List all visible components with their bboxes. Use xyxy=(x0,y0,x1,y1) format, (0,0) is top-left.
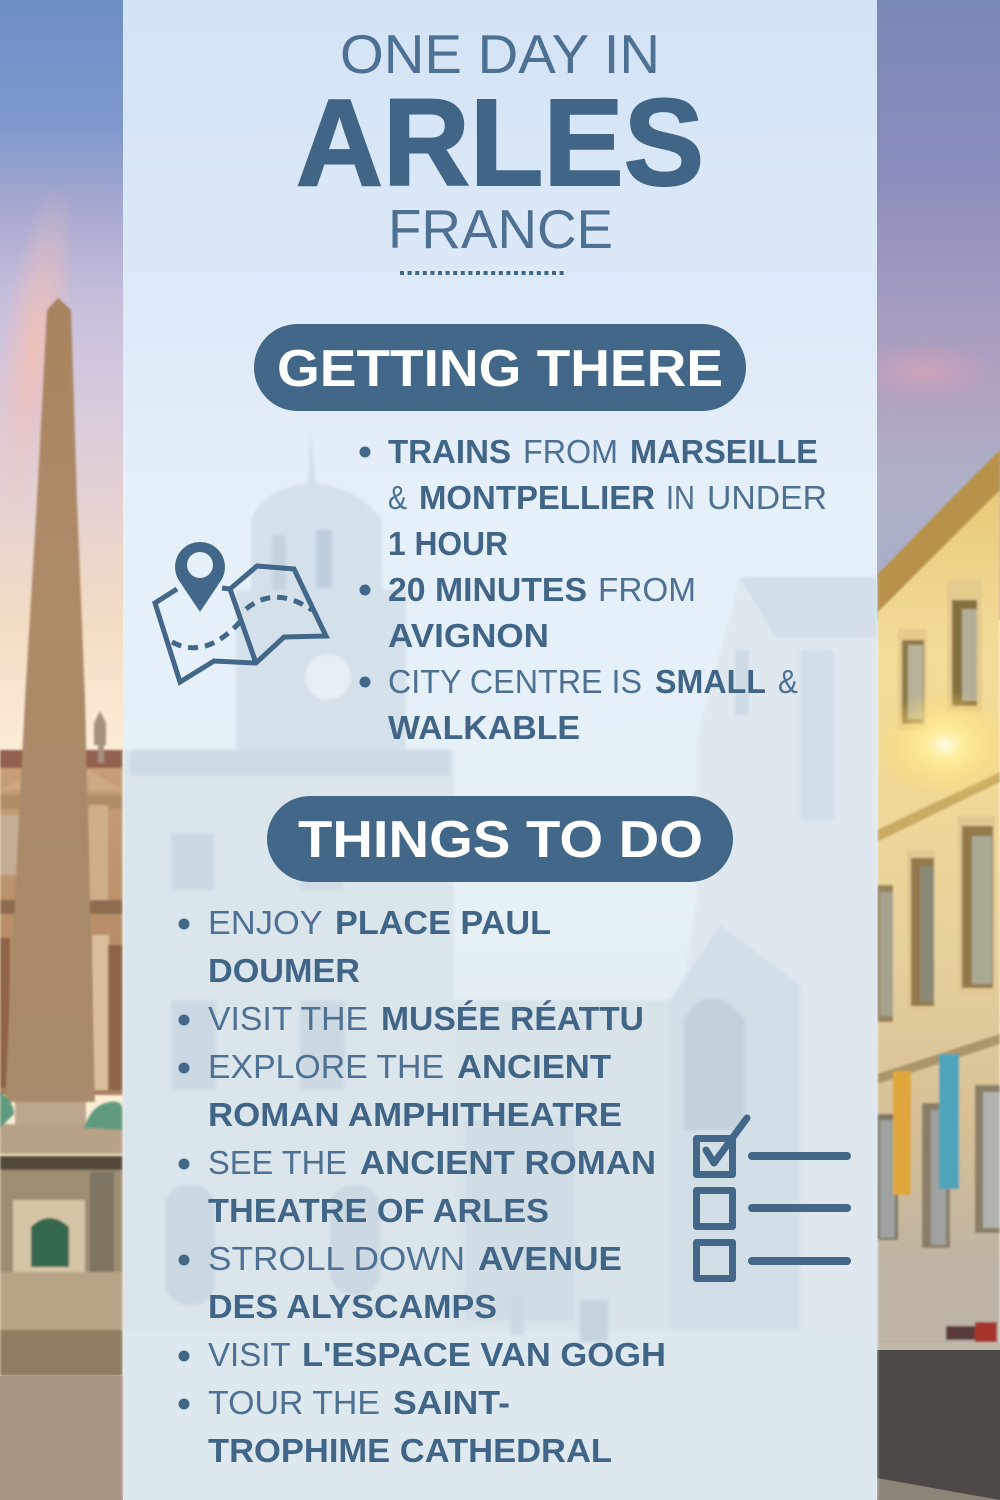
item: city centre: WALKABLE xyxy=(388,709,580,746)
item: cathedral: SAINT- xyxy=(393,1384,510,1421)
item: Place Paul Doumer: DOUMER xyxy=(208,952,360,989)
item: Alyscamps: DES ALYSCAMPS xyxy=(208,1288,497,1325)
item: trains xyxy=(388,433,827,562)
item: trains: IN xyxy=(666,479,695,516)
heading pill: getting there xyxy=(254,324,746,411)
translucent content panel with faded city view xyxy=(123,0,877,1500)
bullets xyxy=(360,446,370,688)
faded clock tower xyxy=(236,430,406,750)
list: things to do xyxy=(178,904,666,1469)
item: Espace Van Gogh: VISIT xyxy=(208,1336,290,1373)
heading pill: getting there: GETTING THERE xyxy=(277,340,723,398)
item: trains: 1 HOUR xyxy=(388,525,508,562)
title xyxy=(296,23,704,260)
faded street and walkers xyxy=(123,1330,877,1500)
item: Musée Réattu: MUSÉE RÉATTU xyxy=(381,1000,644,1037)
title line: one day in: ONE DAY IN xyxy=(340,23,660,85)
item: trains: & xyxy=(388,479,407,516)
item: cathedral xyxy=(208,1384,612,1469)
item: amphitheatre xyxy=(208,1048,622,1133)
faded mid-street buildings xyxy=(454,1000,680,1335)
item: cathedral: TROPHIME CATHEDRAL xyxy=(208,1432,612,1469)
lions xyxy=(0,1092,14,1128)
item: Place Paul Doumer: PLACE PAUL xyxy=(335,904,551,941)
item: Roman theatre: THEATRE OF ARLES xyxy=(208,1192,549,1229)
item: Avignon xyxy=(388,571,696,654)
item: Place Paul Doumer xyxy=(208,904,551,989)
item: Avignon: 20 MINUTES xyxy=(388,571,587,608)
icon: map with location pin xyxy=(155,542,326,682)
faded church xyxy=(680,577,877,1340)
item: Avignon: FROM xyxy=(598,571,696,608)
item: Musée Réattu: VISIT THE xyxy=(208,1000,368,1037)
item: trains: FROM xyxy=(523,433,618,470)
title line: Arles: ARLES xyxy=(296,75,704,212)
item: Alyscamps: AVENUE xyxy=(478,1240,622,1277)
icon: checklist xyxy=(696,1118,847,1278)
faded left building xyxy=(123,750,454,1340)
title line: France: FRANCE xyxy=(388,198,613,260)
item: trains: MONTPELLIER xyxy=(419,479,655,516)
bullets xyxy=(178,918,190,1410)
item: amphitheatre: ROMAN AMPHITHEATRE xyxy=(208,1096,622,1133)
item: trains: MARSEILLE xyxy=(630,433,818,470)
item: Roman theatre: ANCIENT ROMAN xyxy=(360,1144,656,1181)
item: Alyscamps xyxy=(208,1240,622,1325)
item: city centre xyxy=(388,663,798,746)
item: Avignon: AVIGNON xyxy=(388,617,549,654)
item: Alyscamps: STROLL DOWN xyxy=(208,1240,465,1277)
item: amphitheatre: ANCIENT xyxy=(457,1048,611,1085)
item: Roman theatre xyxy=(208,1144,656,1229)
left facade xyxy=(0,711,123,1095)
small statue xyxy=(94,711,106,745)
item: Espace Van Gogh: L'ESPACE VAN GOGH xyxy=(302,1336,666,1373)
item: trains: UNDER xyxy=(707,479,827,516)
item: city centre: SMALL xyxy=(655,663,766,700)
list: getting there xyxy=(360,433,827,746)
right building xyxy=(877,450,1000,1345)
item: amphitheatre: EXPLORE THE xyxy=(208,1048,444,1085)
item: city centre: & xyxy=(778,663,798,700)
item: cathedral: TOUR THE xyxy=(208,1384,380,1421)
obelisk xyxy=(0,298,123,1376)
item: city centre: CITY CENTRE IS xyxy=(388,663,642,700)
heading pill: things to do xyxy=(267,796,733,882)
heading pill: things to do: THINGS TO DO xyxy=(298,811,703,869)
item: Roman theatre: SEE THE xyxy=(208,1144,347,1181)
item: Place Paul Doumer: ENJOY xyxy=(208,904,323,941)
item: trains: TRAINS xyxy=(388,433,511,470)
